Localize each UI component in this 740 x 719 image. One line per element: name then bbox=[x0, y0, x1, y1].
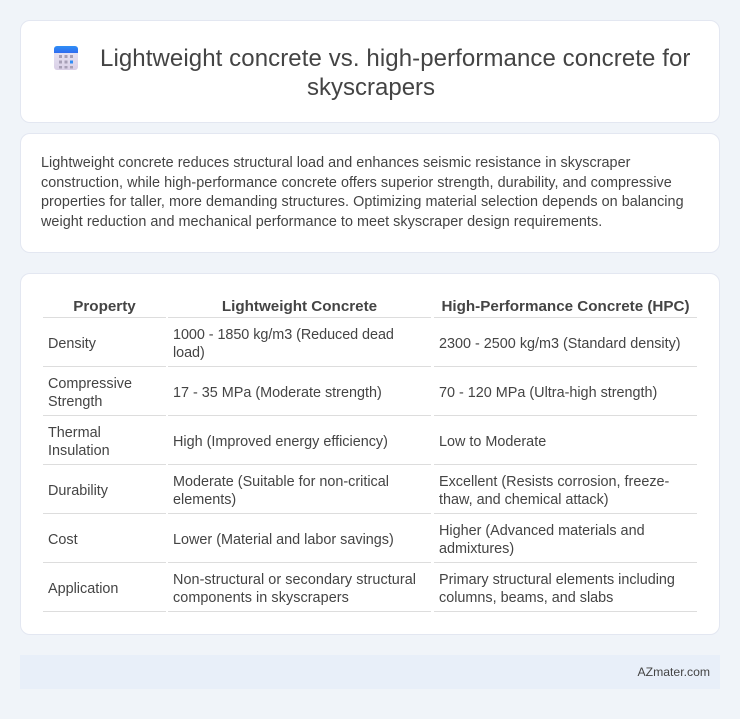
header row: Property bbox=[73, 298, 136, 315]
row: density: 2300 - 2500 kg/m3 (Standard density) bbox=[439, 336, 681, 352]
title: Lightweight concrete vs. high-performance concrete for bbox=[100, 45, 690, 72]
row: density: load) bbox=[173, 345, 205, 361]
panel: description bbox=[20, 133, 720, 253]
row: thermal insulation bbox=[48, 425, 546, 459]
row: cost: Higher (Advanced materials and bbox=[439, 523, 645, 539]
description text bbox=[41, 155, 684, 230]
row: thermal insulation: Thermal bbox=[48, 425, 101, 441]
header row: High-Performance Concrete (HPC) bbox=[441, 298, 690, 315]
row: application: columns, beams, and slabs bbox=[439, 590, 613, 606]
row: cost: admixtures) bbox=[439, 541, 514, 557]
row: thermal insulation: Low to Moderate bbox=[439, 434, 546, 450]
row: density: Density bbox=[48, 336, 96, 352]
row: durability bbox=[48, 474, 669, 508]
row: density bbox=[48, 327, 681, 361]
row: compressive strength: 70 - 120 MPa (Ultra-high strength) bbox=[439, 385, 657, 401]
row: compressive strength: Strength bbox=[48, 394, 102, 410]
row: cost: Cost bbox=[48, 532, 78, 548]
description text: construction, while high-performance concrete offers superior strength, durability, and compressive bbox=[41, 175, 672, 191]
description text: Lightweight concrete reduces structural load and enhances seismic resistance in skyscraper bbox=[41, 155, 630, 171]
row: application: components in skyscrapers bbox=[173, 590, 349, 606]
row: application: Application bbox=[48, 581, 118, 597]
header row bbox=[73, 298, 690, 315]
header panel bbox=[20, 20, 720, 123]
row: thermal insulation: Insulation bbox=[48, 443, 110, 459]
title bbox=[100, 45, 690, 101]
row: durability: Durability bbox=[48, 483, 108, 499]
header row: Lightweight Concrete bbox=[222, 298, 377, 315]
row: compressive strength: Compressive bbox=[48, 376, 132, 392]
footer credit: AZmater.com bbox=[638, 665, 710, 679]
row: application: Primary structural elements including bbox=[439, 572, 675, 588]
footer bbox=[20, 655, 720, 689]
row: cost bbox=[48, 523, 645, 557]
description text: properties for taller, more demanding structures. Optimizing material selection depends on balancing bbox=[41, 194, 684, 210]
row: compressive strength: 17 - 35 MPa (Moderate strength) bbox=[173, 385, 382, 401]
row: compressive strength bbox=[48, 376, 657, 410]
description text: weight reduction and mechanical performance to meet skyscraper design requirements. bbox=[41, 214, 602, 230]
row: cost: Lower (Material and labor savings) bbox=[173, 532, 394, 548]
row: durability: thaw, and chemical attack) bbox=[439, 492, 609, 508]
row: durability: Excellent (Resists corrosion, freeze- bbox=[439, 474, 669, 490]
icon: calendar bbox=[54, 46, 78, 70]
row: application: Non-structural or secondary structural bbox=[173, 572, 416, 588]
row: durability: Moderate (Suitable for non-critical bbox=[173, 474, 389, 490]
row: durability: elements) bbox=[173, 492, 236, 508]
title: skyscrapers bbox=[307, 74, 435, 101]
row: density: 1000 - 1850 kg/m3 (Reduced dead bbox=[173, 327, 394, 343]
table bbox=[43, 298, 697, 612]
panel: comparison table bbox=[20, 273, 720, 635]
row: thermal insulation: High (Improved energy efficiency) bbox=[173, 434, 388, 450]
row: application bbox=[48, 572, 675, 606]
